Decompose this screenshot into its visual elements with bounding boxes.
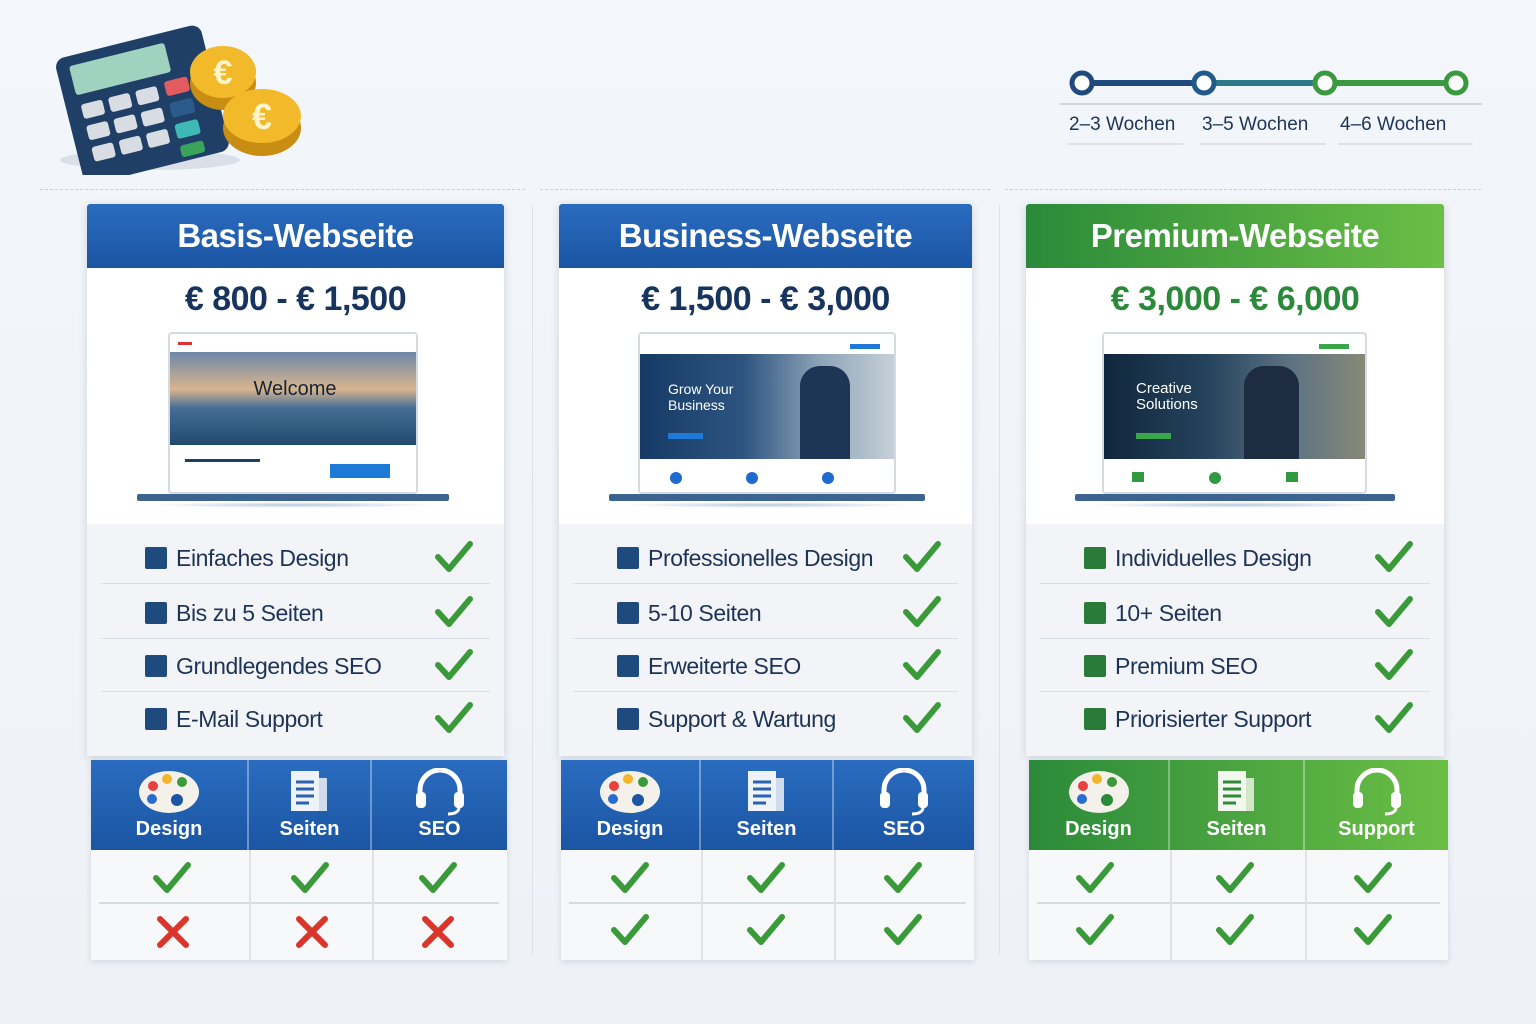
feature list: Professionelles Design: [648, 545, 873, 571]
panel: Basis-Webseite: [87, 204, 504, 756]
price: € 800 - € 1,500: [185, 280, 406, 318]
icon bar: Design: [1065, 818, 1132, 840]
feature list: Bis zu 5 Seiten: [176, 600, 323, 626]
feature list: 5-10 Seiten: [648, 600, 761, 626]
laptop mockup: [137, 332, 449, 508]
timeline: [1060, 70, 1482, 145]
icon bar: Seiten: [279, 818, 340, 840]
icon bar: SEO: [883, 818, 925, 840]
feature list: Einfaches Design: [176, 545, 349, 571]
icon bar: [561, 760, 974, 850]
check marks: [1037, 850, 1440, 960]
icon: calculator and coins: €: [252, 96, 272, 137]
icon bar: Design: [597, 818, 663, 840]
price: € 3,000 - € 6,000: [1111, 280, 1359, 318]
laptop mockup: Grow Your: [668, 381, 733, 397]
feature list: [559, 524, 972, 756]
panel: Premium-Webseite: [1026, 204, 1444, 756]
icon bar: Seiten: [736, 818, 797, 840]
heading: Business-Webseite: [619, 217, 912, 254]
laptop mockup: Welcome: [254, 378, 336, 400]
timeline labels: 4–6 Wochen: [1340, 114, 1446, 135]
feature list: [87, 524, 504, 756]
icon: calculator and coins: €: [214, 54, 233, 92]
feature list: Individuelles Design: [1115, 545, 1312, 571]
icon bar: SEO: [418, 818, 461, 840]
heading: [87, 204, 504, 268]
timeline labels: 2–3 Wochen: [1069, 114, 1175, 135]
laptop mockup: Creative: [1136, 380, 1192, 397]
feature list: E-Mail Support: [176, 706, 323, 732]
heading: Basis-Webseite: [177, 217, 414, 254]
price: € 1,500 - € 3,000: [641, 280, 890, 318]
table: Premium comparison: [1029, 760, 1448, 960]
icon bar: Support: [1338, 818, 1415, 840]
icon bar: Seiten: [1206, 818, 1267, 840]
check marks: [99, 850, 499, 960]
laptop mockup: [609, 332, 925, 508]
icon: calculator and coins: [56, 26, 301, 175]
laptop mockup: [1075, 332, 1395, 508]
feature list: 10+ Seiten: [1115, 600, 1222, 626]
heading: Premium-Webseite: [1091, 217, 1379, 254]
icon bar: [91, 760, 507, 850]
table: Basis comparison: [91, 760, 507, 960]
icon bar: [1029, 760, 1448, 850]
panel: Business-Webseite: [559, 204, 972, 756]
timeline labels: 3–5 Wochen: [1202, 114, 1308, 135]
timeline labels: [1069, 114, 1446, 135]
check marks: [569, 850, 966, 960]
laptop mockup: Business: [668, 397, 725, 413]
feature list: Grundlegendes SEO: [176, 653, 381, 679]
heading: [1026, 204, 1444, 268]
table: Business comparison: [561, 760, 974, 960]
feature list: Erweiterte SEO: [648, 653, 801, 679]
icon bar: Design: [136, 818, 202, 840]
feature list: Priorisierter Support: [1115, 706, 1311, 732]
heading: [559, 204, 972, 268]
feature list: Support & Wartung: [648, 706, 836, 732]
feature list: [1026, 524, 1444, 756]
feature list: Premium SEO: [1115, 653, 1258, 679]
laptop mockup: Solutions: [1136, 396, 1198, 413]
